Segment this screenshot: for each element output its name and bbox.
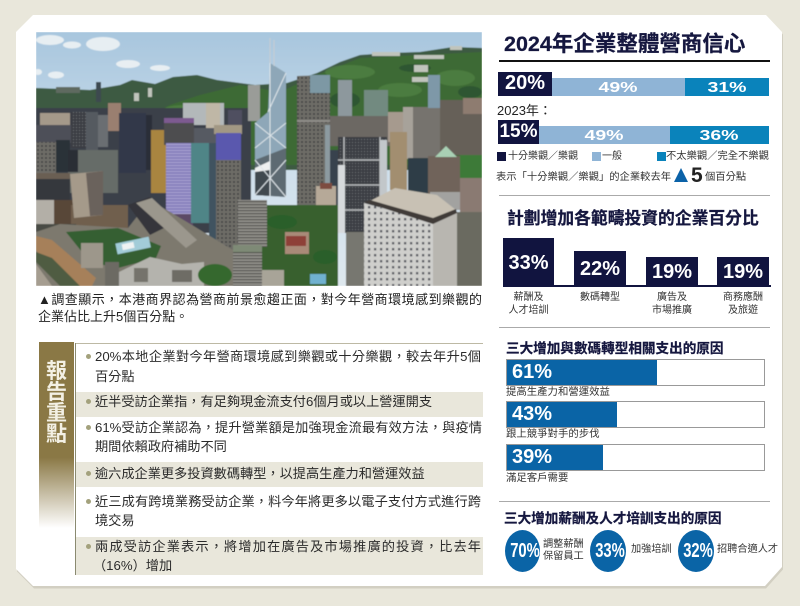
sidebar heading: 點 <box>46 423 67 446</box>
stacked bar: 2024: 31% <box>707 79 747 96</box>
legend: 一般 <box>602 151 622 162</box>
sidebar heading: 報 <box>46 360 67 383</box>
note: change from last year: 5 <box>691 164 703 187</box>
photo caption: ▲調查顯示，本港商界認為營商前景愈趨正面，對今年營商環境感到樂觀的 <box>38 292 482 307</box>
panel: key report points <box>39 342 74 525</box>
bar labels: 人才培訓 <box>508 305 548 316</box>
bullet 6 <box>86 539 481 573</box>
bullet 1: 20%本地企業對今年營商環境感到樂觀或十分樂觀，較去年升5個 <box>95 349 481 364</box>
progress bar: 61% <box>506 359 765 386</box>
hills <box>36 46 482 170</box>
heading: business confidence: 2024年企業整體營商信心 <box>504 32 745 56</box>
small tan tower <box>316 183 336 232</box>
mid towers <box>330 75 482 159</box>
Cheung Kong Center <box>297 75 330 212</box>
legend: 不太樂觀／完全不樂觀 <box>666 151 769 162</box>
label: customers: 滿足客戶需要 <box>506 473 568 484</box>
stacked bar: 2023: 49% <box>585 127 624 144</box>
photo caption <box>38 292 482 324</box>
bullet 1: 百分點 <box>95 369 135 384</box>
bar labels: 市場推廣 <box>652 305 692 316</box>
stacked bar: 2023: 36% <box>700 127 739 144</box>
stat circle: 33%: 加強培訓 <box>631 544 672 555</box>
white tower <box>346 188 457 286</box>
bar labels: 廣告及 <box>657 292 687 303</box>
bar labels: 及旅遊 <box>728 305 758 316</box>
stripe towers lower left of centre <box>233 200 267 286</box>
colonial court and gardens <box>262 205 338 286</box>
progress bar: 43% <box>506 401 765 428</box>
label: productivity: 提高生產力和營運效益 <box>506 387 610 398</box>
bar chart: planned investment: 19% <box>652 261 692 283</box>
orange tower <box>151 130 166 193</box>
clouds <box>34 35 170 78</box>
stacked bar: 2024 <box>498 72 769 96</box>
legend: 十分樂觀／樂觀 <box>508 151 578 162</box>
photo: Hong Kong Central skyline <box>36 32 482 286</box>
note: change from last year: 個百分點 <box>705 172 746 183</box>
bar labels: 商務應酬 <box>723 292 763 303</box>
bar labels <box>508 291 763 316</box>
sidebar heading: 告 <box>46 381 67 404</box>
bar chart: planned investment: 19% <box>723 261 763 283</box>
bar chart: planned investment <box>503 238 771 287</box>
bullet 3 <box>86 420 482 454</box>
stat circle: 70%: 70% <box>510 540 540 562</box>
label: keep up: 跟上競爭對手的步伐 <box>506 429 600 440</box>
stat circle: 32%: 32% <box>683 540 713 562</box>
heading: investment by category: 計劃增加各範疇投資的企業百分比 <box>507 209 759 228</box>
bullet 5 <box>86 494 481 528</box>
note: change from last year: 表示「十分樂觀／樂觀」的企業較去年 <box>496 172 671 183</box>
heading: digital reasons: 三大增加與數碼轉型相關支出的原因 <box>506 341 724 356</box>
bullet 2: 近半受訪企業指，有足夠現金流支付6個月或以上營運開支 <box>95 394 432 409</box>
bullet 6: 兩成受訪企業表示，將增加在廣告及市場推廣的投資，比去年 <box>95 539 481 554</box>
label: 2023: 2023年： <box>497 103 552 118</box>
left grey towers <box>36 150 151 238</box>
progress bar: 39% <box>506 444 765 471</box>
stat circle: 33%: 33% <box>595 540 625 562</box>
bullet 3: 期間依賴政府補助不同 <box>95 439 227 454</box>
stat circle: 70%: 保留員工 <box>543 551 584 562</box>
right cluster <box>390 132 482 286</box>
legend <box>497 150 769 162</box>
stacked bar: 2024: 20% <box>505 72 545 94</box>
blue-violet block <box>194 125 242 255</box>
bullet 4: 逾六成企業更多投資數碼轉型，以提高生產力和營運效益 <box>95 466 425 481</box>
stat circle: 32% <box>678 530 778 572</box>
stat circle: 70%: 調整薪酬 <box>543 539 584 550</box>
stat circle: 70% <box>505 530 584 572</box>
note: change from last year <box>496 164 746 187</box>
bar labels: 數碼轉型 <box>580 292 620 303</box>
progress bar: 39%: 39% <box>512 446 552 468</box>
photo caption: 企業佔比上升5個百分點。 <box>38 309 188 324</box>
stacked bar: 2023 <box>498 120 769 144</box>
progress bar: 61%: 61% <box>512 361 552 383</box>
bullet 5: 境交易 <box>95 513 135 528</box>
bullet 1 <box>86 349 481 384</box>
stacked bar: 2023: 15% <box>499 121 538 142</box>
stat circle: 33% <box>590 530 672 572</box>
bar chart: planned investment: 33% <box>508 252 549 274</box>
heading: talent reasons: 三大增加薪酬及人才培訓支出的原因 <box>504 511 722 526</box>
bullet 6: （16%）增加 <box>93 558 172 573</box>
bar chart: planned investment: 22% <box>580 258 620 280</box>
progress bar: 43%: 43% <box>512 403 552 425</box>
bullet 5: 近三成有跨境業務受訪企業，料今年將更多以電子支付方式進行跨 <box>95 494 481 509</box>
bar labels: 薪酬及 <box>514 292 544 303</box>
stacked bar: 2024: 49% <box>599 79 638 96</box>
stat circle: 32%: 招聘合適人才 <box>717 544 778 555</box>
dark and purple tower <box>164 118 209 228</box>
Bank of China Tower <box>248 38 286 197</box>
sidebar heading <box>39 342 74 528</box>
ground, park and roads <box>36 197 241 286</box>
dark city mass left <box>36 103 251 233</box>
HSBC building <box>330 137 387 233</box>
bullet 3: 61%受訪企業認為，提升營業額是加強現金流最有效方法，與疫情 <box>95 420 482 435</box>
sidebar heading: 重 <box>46 402 67 425</box>
